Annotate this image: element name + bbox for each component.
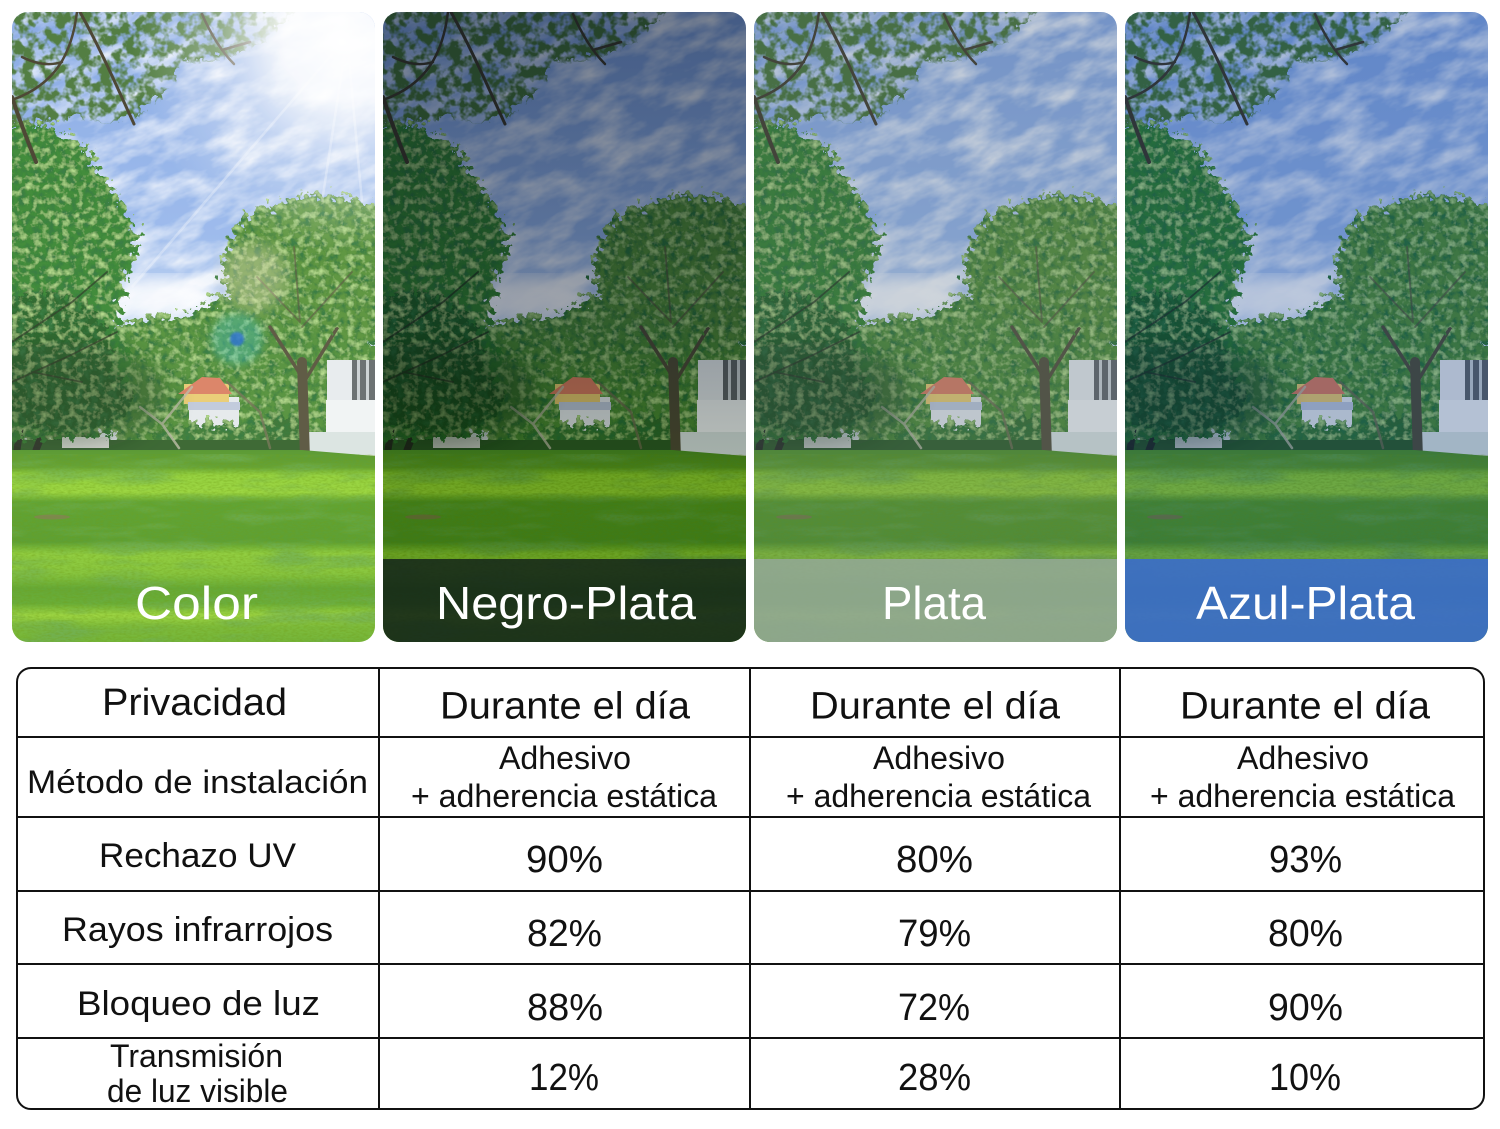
row: installation method: Método de instalación: [27, 764, 368, 800]
row: UV rejection: [99, 837, 1342, 881]
panel: Azul-Plata: [1125, 12, 1488, 642]
row: UV rejection: Rechazo UV: [99, 837, 296, 875]
row: light blocking: Bloqueo de luz: [77, 985, 320, 1023]
panel: Plata: [754, 12, 1117, 642]
tint: black-silver: [383, 12, 746, 642]
panel: Color: [12, 12, 375, 642]
row: light blocking: 72%: [898, 987, 970, 1029]
sun glare: [12, 12, 375, 642]
row: visible light transmission: 12%: [529, 1057, 599, 1099]
photo: park through silver film: [754, 12, 1117, 642]
photo: park through black-silver film: [383, 12, 746, 642]
label: Color: Color: [135, 577, 258, 629]
row: light blocking: 88%: [527, 987, 603, 1029]
lens flare: [211, 243, 288, 365]
header row: [102, 682, 1431, 728]
header row: Durante el día: [1180, 686, 1431, 728]
row: UV rejection: 80%: [896, 839, 973, 881]
row: installation method: [27, 740, 1455, 814]
label: Plata: Plata: [882, 577, 986, 629]
label band: Negro-Plata: [383, 559, 746, 642]
header row: Privacidad: [102, 682, 287, 724]
row: visible light transmission: 10%: [1269, 1057, 1341, 1099]
label band: Azul-Plata: [1125, 559, 1488, 642]
table grid: [17, 668, 1484, 1109]
row: infrared rays: 82%: [527, 913, 602, 955]
row: visible light transmission: Transmisión: [110, 1038, 283, 1074]
row: light blocking: 90%: [1268, 987, 1343, 1029]
tint: blue-silver: [1125, 12, 1488, 642]
row: installation method: + adherencia estática: [786, 778, 1091, 814]
row: light blocking: [77, 985, 1343, 1029]
row: installation method: + adherencia estática: [1150, 778, 1455, 814]
tint: silver: [754, 12, 1117, 642]
row: infrared rays: 80%: [1268, 913, 1343, 955]
header row: Durante el día: [440, 686, 691, 728]
row: infrared rays: [62, 911, 1343, 955]
row: infrared rays: 79%: [898, 913, 971, 955]
label: Negro-Plata: Negro-Plata: [436, 577, 696, 629]
photo: park in natural colour: [12, 12, 375, 642]
panel: Negro-Plata: [383, 12, 746, 642]
row: installation method: Adhesivo: [873, 740, 1005, 776]
row: UV rejection: 90%: [526, 839, 603, 881]
row: visible light transmission: 28%: [898, 1057, 971, 1099]
row: installation method: Adhesivo: [1237, 740, 1369, 776]
label: Azul-Plata: Azul-Plata: [1196, 577, 1415, 629]
comparison table: [17, 668, 1484, 1109]
photo: park through blue-silver film: [1125, 12, 1488, 642]
row: visible light transmission: de luz visible: [107, 1073, 288, 1109]
row: installation method: Adhesivo: [499, 740, 631, 776]
row: installation method: + adherencia estática: [411, 778, 717, 814]
row: visible light transmission: [107, 1038, 1341, 1109]
row: infrared rays: Rayos infrarrojos: [62, 911, 333, 949]
header row: Durante el día: [810, 686, 1061, 728]
label band: Plata: [754, 559, 1117, 642]
row: UV rejection: 93%: [1269, 839, 1342, 881]
